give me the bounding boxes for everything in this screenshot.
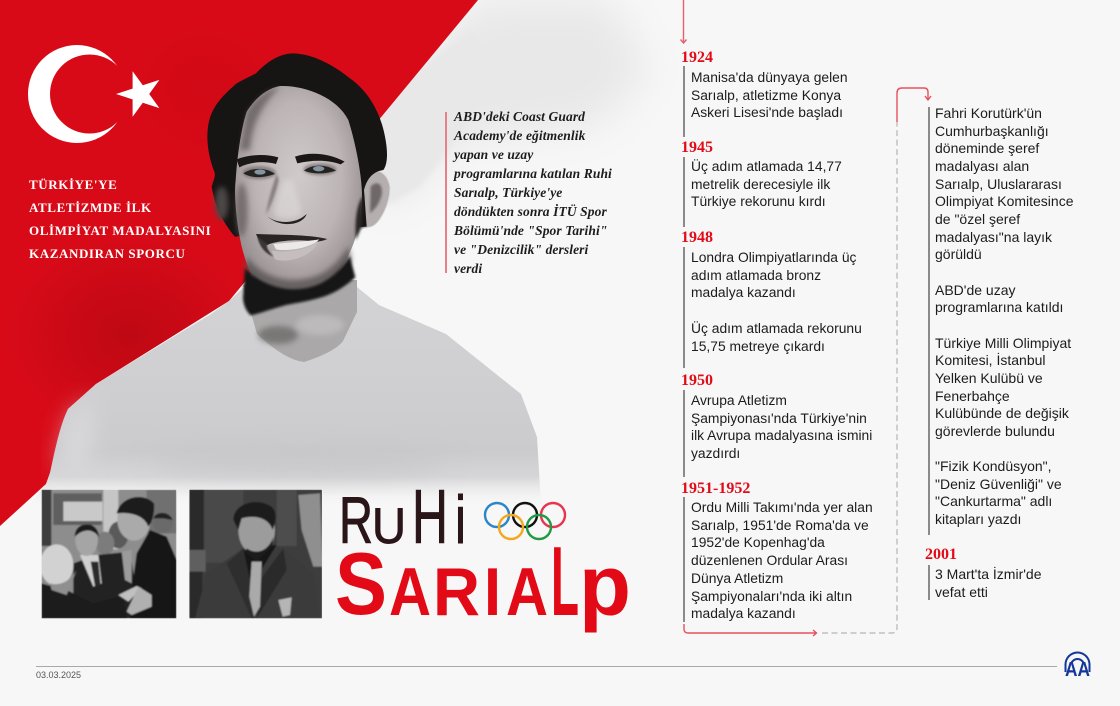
text: Komitesi, İstanbul (935, 352, 1046, 368)
hairline shadow (240, 87, 280, 150)
text: programlarına katıldı (935, 299, 1063, 315)
left cheek shadow (236, 183, 248, 237)
name: Sarıalp: L (551, 526, 579, 636)
quote text: Sarıalp, Türkiye'ye (454, 185, 562, 200)
name: Ruhi (339, 475, 466, 560)
text: Üç adım atlamada rekorunu (691, 320, 862, 336)
text: madalyası"na layık (935, 229, 1052, 245)
portrait: Ruhi Sarıalp (30, 53, 541, 505)
text: madalya kazandı (691, 284, 796, 300)
text (691, 392, 872, 461)
timeline: 1924 (681, 49, 848, 137)
beard (243, 257, 355, 315)
right eye (304, 166, 336, 173)
text: vefat etti (935, 584, 988, 600)
text: Türkiye rekorunu kırdı (691, 193, 826, 209)
text (935, 566, 1041, 600)
name: Ruhi: H (412, 475, 448, 560)
timeline: 1951-1952 (681, 480, 873, 622)
right sideburn (356, 195, 363, 240)
logo: Anadolu Agency (1064, 652, 1090, 681)
timeline: 2001 (925, 546, 1041, 600)
text: görüldü (935, 246, 982, 262)
text: düzenlenen Ordular Arası (691, 552, 848, 568)
stubble shading (245, 247, 352, 292)
right iris (313, 166, 324, 171)
text: Yelken Kulübü ve (935, 370, 1043, 386)
timeline: 1945 (681, 139, 842, 227)
text: Avrupa Atletizm (691, 392, 787, 408)
text: Üç adım atlamada 14,77 (691, 158, 842, 174)
text: Şampiyonası'nda Türkiye'nin (691, 410, 867, 426)
text (691, 69, 848, 120)
text (691, 499, 873, 621)
quote text: verdi (454, 261, 482, 276)
text: 15,75 metreye çıkardı (691, 338, 825, 354)
grey watercolor wash (370, 0, 650, 204)
timeline: 1948 (681, 229, 862, 368)
nose highlight (275, 180, 302, 219)
bar (928, 565, 930, 600)
title: OLİMPİYAT MADALYASINI (29, 223, 211, 238)
footer rule (36, 666, 1057, 667)
arrow: timeline start (680, 0, 686, 43)
quote text: ve "Denizcilik" dersleri (454, 242, 588, 257)
text: "Cankurtarma" adlı (935, 493, 1052, 509)
left eye socket (243, 166, 276, 179)
teeth (273, 239, 319, 250)
right ear (360, 171, 390, 229)
icon: Olympic rings (485, 503, 565, 539)
text (935, 105, 1074, 527)
bar (683, 66, 685, 137)
bar (683, 390, 685, 477)
portrait neck (243, 280, 357, 362)
year 1945: 1945 (681, 139, 713, 156)
mouth corner shadow (257, 237, 273, 257)
title: KAZANDIRAN SPORCU (29, 246, 185, 261)
portrait shirt (30, 287, 541, 505)
text: ABD'de uzay (935, 282, 1016, 298)
nose shadow (266, 173, 279, 215)
nose base (266, 214, 307, 224)
name: Sarıalp: A (389, 554, 431, 630)
year 1951-1952: 1951-1952 (681, 480, 750, 497)
text: Manisa'da dünyaya gelen (691, 69, 848, 85)
name: Sarıalp: S (335, 534, 387, 633)
quote text: döndükten sonra İTÜ Spor (454, 204, 607, 219)
right brow (295, 154, 345, 164)
arrow: column connector (684, 88, 931, 636)
quote text: Academy'de eğitmenlik (454, 128, 585, 143)
text: Türkiye Milli Olimpiyat (935, 335, 1071, 351)
bar (683, 497, 685, 622)
year 2001: 2001 (925, 546, 957, 563)
right eye socket (303, 163, 337, 175)
bar (928, 107, 930, 535)
year 1924: 1924 (681, 49, 713, 66)
icon: Turkish crescent and star (28, 45, 159, 143)
name: Ruhi: R (339, 483, 373, 557)
quote accent bar (445, 112, 447, 273)
bar (683, 247, 685, 368)
text: Sarıalp, atletizme Konya (691, 87, 841, 103)
text: Olimpiyat Komitesince (935, 193, 1074, 209)
quote text: yapan ve uzay (454, 147, 533, 162)
text: Şampiyonaları'nda iki altın (691, 588, 852, 604)
text: metrelik derecesiyle ilk (691, 176, 830, 192)
text: madalya kazandı (691, 605, 796, 621)
text: Ordu Milli Takımı'nda yer alan (691, 499, 873, 515)
text: de "özel şeref (935, 211, 1020, 227)
text: döneminde şeref (935, 140, 1039, 156)
text (691, 158, 842, 209)
name: Sarıalp: R (433, 554, 480, 630)
text: madalyası alan (935, 158, 1029, 174)
year 1950: 1950 (681, 372, 713, 389)
left iris (254, 169, 266, 175)
upper lip (256, 234, 327, 245)
text: Fenerbahçe (935, 388, 1010, 404)
text: yazdırdı (691, 445, 740, 461)
bar (683, 157, 685, 227)
name: Sarıalp: I (484, 554, 501, 630)
face (235, 86, 362, 300)
red diagonal panel (0, 0, 478, 526)
text: Dünya Atletizm (691, 570, 783, 586)
hair silhouette (207, 53, 387, 237)
text: Askeri Lisesi'nde başladı (691, 104, 843, 120)
text: Sarıalp, 1951'de Roma'da ve (691, 517, 869, 533)
text: kitapları yazdı (935, 511, 1021, 527)
text: 3 Mart'ta İzmir'de (935, 566, 1041, 582)
name: Sarıalp (335, 526, 631, 636)
quote text (452, 109, 612, 276)
date: 03.03.2025 (36, 670, 81, 680)
text: Fahri Korutürk'ün (935, 105, 1042, 121)
text: ilk Avrupa madalyasına ismini (691, 427, 872, 443)
name: Ruhi: U (372, 498, 406, 554)
text: görevlerde bulundu (935, 423, 1055, 439)
right ear inner shadow (370, 183, 382, 213)
photo: medal ceremony (40, 489, 177, 619)
text: 1952'de Kopenhag'da (691, 534, 825, 550)
quote text: Bölümü'nde "Spor Tarihi" (454, 223, 607, 238)
name: Sarıalp: p (579, 539, 631, 634)
name: Sarıalp: A (506, 554, 548, 630)
name: Ruhi: i (455, 482, 466, 558)
timeline: 1950 (681, 372, 872, 477)
left ear tone (215, 187, 228, 220)
title (29, 177, 211, 261)
timeline: later years (928, 105, 1074, 535)
quote text: programlarına katılan Ruhi (454, 166, 612, 181)
quote text: ABD'deki Coast Guard (454, 109, 585, 124)
year 1948: 1948 (681, 229, 713, 246)
left eye (243, 169, 275, 177)
text: Kulübünde de değişik (935, 405, 1069, 421)
text: Cumhurbaşkanlığı (935, 123, 1049, 139)
lower lip (272, 242, 318, 261)
text: adım atlamada bronz (691, 267, 821, 283)
portrait head, drawn in 3x zoomed coordinates (207, 53, 390, 315)
title: TÜRKİYE'YE (29, 177, 117, 192)
text: "Deniz Güvenliği" ve (935, 476, 1062, 492)
text (691, 249, 862, 354)
left brow (237, 155, 278, 167)
text: Londra Olimpiyatlarında üç (691, 249, 856, 265)
title: ATLETİZMDE İLK (29, 200, 152, 215)
logo: Anadolu Agency: AA (1065, 659, 1090, 681)
text: "Fizik Kondüsyon", (935, 458, 1052, 474)
text: Sarıalp, Uluslararası (935, 176, 1062, 192)
photo: portrait in blazer (189, 489, 322, 619)
